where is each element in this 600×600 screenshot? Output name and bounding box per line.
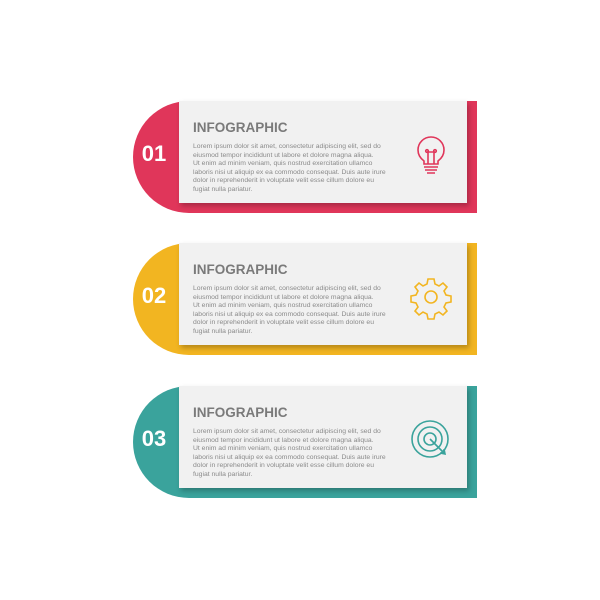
body text — [193, 428, 386, 478]
body text: Lorem ipsum dolor sit amet, consectetur adipiscing elit, sed do — [193, 143, 381, 150]
body text: dolor in reprehenderit in voluptate velit esse cillum dolore eu — [193, 319, 374, 326]
row 3 — [133, 386, 477, 498]
body text — [193, 285, 386, 335]
card 1 — [179, 101, 467, 203]
icon: gear — [410, 278, 452, 320]
icon: light bulb — [417, 136, 445, 174]
body text: Ut enim ad minim veniam, quis nostrud exercitation ullamco — [193, 302, 372, 309]
band: red — [133, 101, 477, 213]
body text: eiusmod tempor incididunt ut labore et dolore magna aliqua. — [193, 152, 374, 159]
body text: Lorem ipsum dolor sit amet, consectetur adipiscing elit, sed do — [193, 285, 381, 292]
body text: laboris nisi ut aliquip ex ea commodo consequat. Duis aute irure — [193, 169, 386, 176]
body text: fugiat nulla pariatur. — [193, 186, 252, 193]
band: teal — [133, 386, 477, 498]
body text: Ut enim ad minim veniam, quis nostrud exercitation ullamco — [193, 160, 372, 167]
icon: target — [411, 420, 449, 458]
body text: fugiat nulla pariatur. — [193, 471, 252, 478]
body text: dolor in reprehenderit in voluptate velit esse cillum dolore eu — [193, 177, 374, 184]
number 01: 01 — [142, 141, 166, 166]
card 2 — [179, 243, 467, 345]
body text: laboris nisi ut aliquip ex ea commodo consequat. Duis aute irure — [193, 311, 386, 318]
number 03: 03 — [142, 426, 166, 451]
card 3 — [179, 386, 467, 488]
body text: dolor in reprehenderit in voluptate velit esse cillum dolore eu — [193, 462, 374, 469]
body text: eiusmod tempor incididunt ut labore et dolore magna aliqua. — [193, 437, 374, 444]
heading: INFOGRAPHIC — [193, 405, 288, 420]
body text: eiusmod tempor incididunt ut labore et dolore magna aliqua. — [193, 294, 374, 301]
body text — [193, 143, 386, 193]
number 02: 02 — [142, 283, 166, 308]
row 1 — [133, 101, 477, 213]
heading: INFOGRAPHIC — [193, 262, 288, 277]
row 2 — [133, 243, 477, 355]
body text: fugiat nulla pariatur. — [193, 328, 252, 335]
body text: Ut enim ad minim veniam, quis nostrud exercitation ullamco — [193, 445, 372, 452]
body text: Lorem ipsum dolor sit amet, consectetur adipiscing elit, sed do — [193, 428, 381, 435]
band: yellow — [133, 243, 477, 355]
heading: INFOGRAPHIC — [193, 120, 288, 135]
body text: laboris nisi ut aliquip ex ea commodo consequat. Duis aute irure — [193, 454, 386, 461]
